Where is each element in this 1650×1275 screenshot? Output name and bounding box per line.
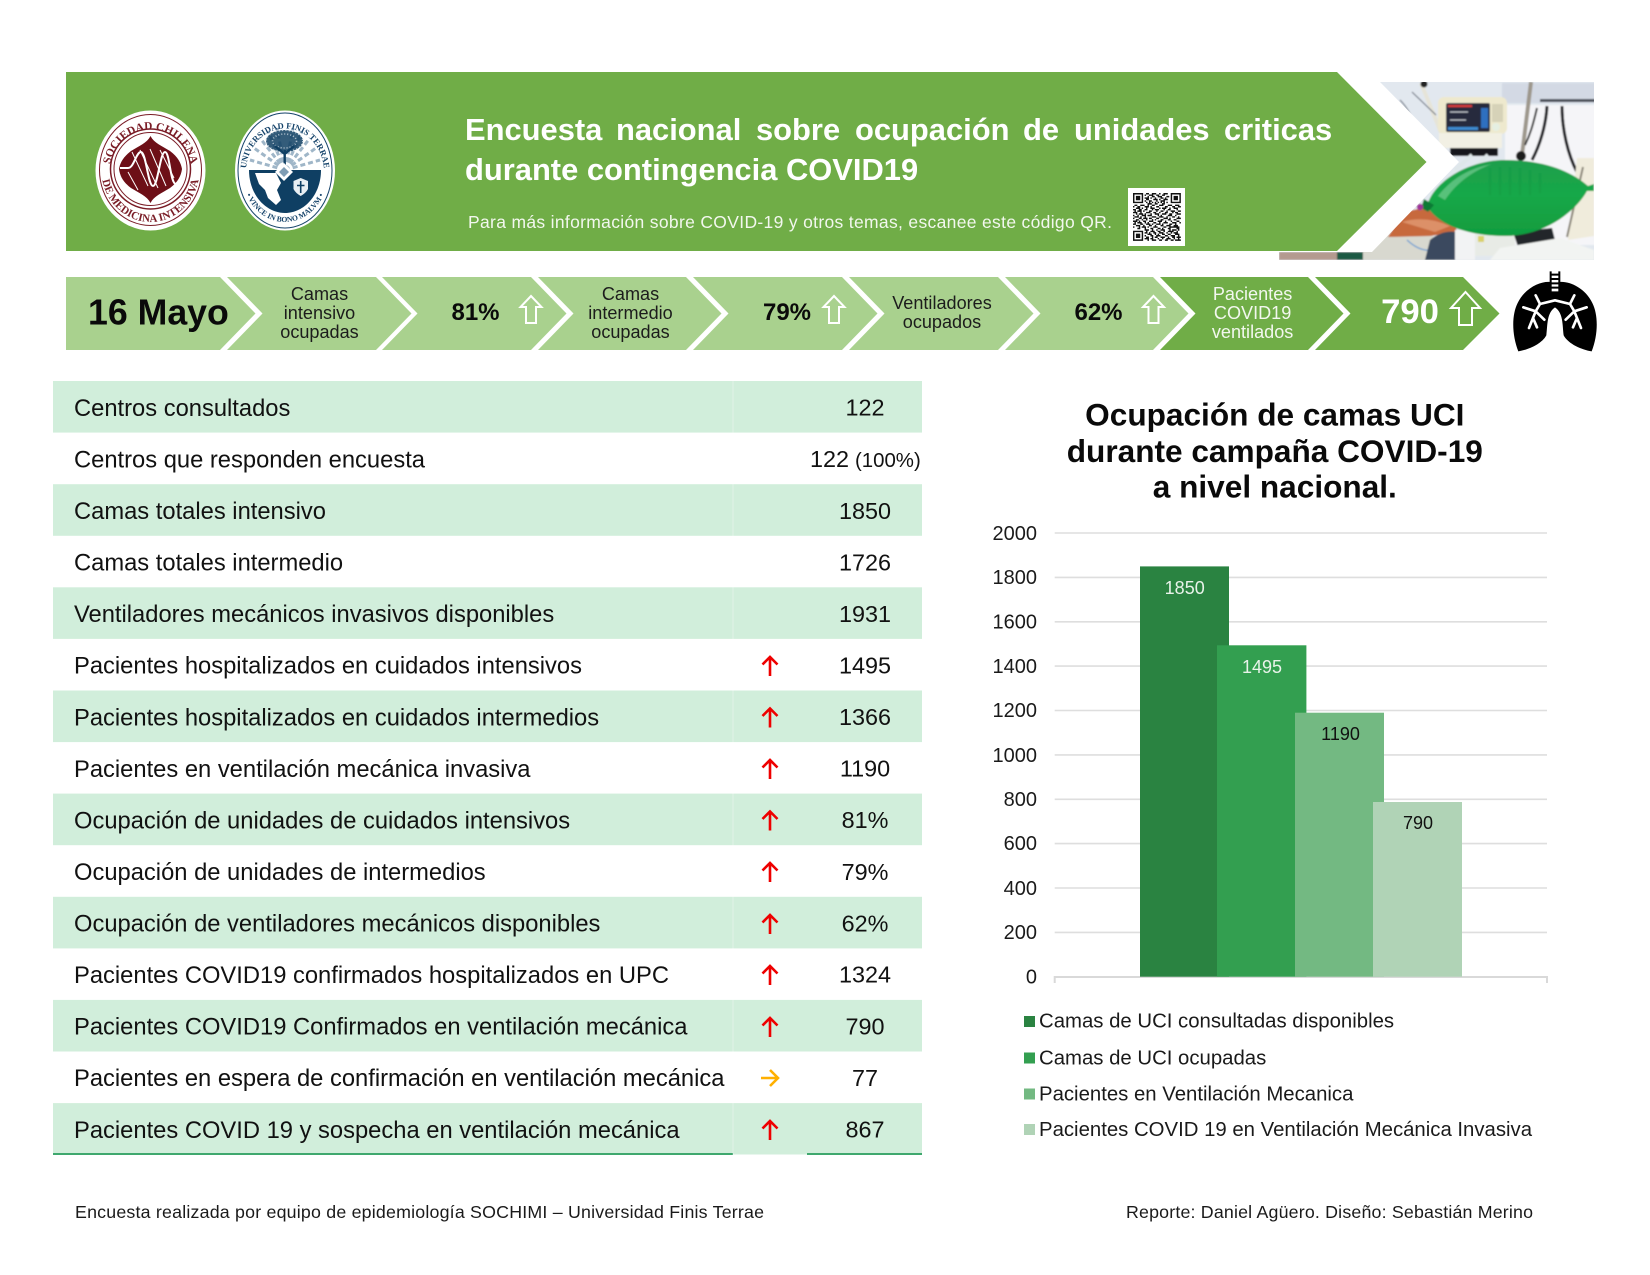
chart title: a nivel nacional. <box>1153 468 1397 504</box>
data table <box>53 381 922 1155</box>
row: ocupación ventiladores: Ocupación de ventiladores mecánicos disponibles <box>74 912 601 938</box>
row: espera de confirmación: 77 <box>852 1065 878 1091</box>
title: de <box>1023 112 1059 147</box>
title: unidades <box>1074 112 1210 147</box>
title: nacional <box>616 112 741 147</box>
logo: Universidad Finis Terrae: • VINCE IN BONO MALVM • <box>248 194 322 222</box>
chart legend <box>1024 1011 1533 1141</box>
row: camas totales intermedio: Camas totales intermedio <box>74 550 343 576</box>
legend: pacientes COVID ventilación: Pacientes COVID 19 en Ventilación Mecánica Invasiva <box>1039 1119 1533 1141</box>
row: hospitalizados intermedios: Pacientes hospitalizados en cuidados intermedios <box>74 705 599 731</box>
legend: camas ocupadas: Camas de UCI ocupadas <box>1039 1047 1266 1069</box>
chevron: camas intermedio ocupadas <box>538 277 722 350</box>
title: criticas <box>1224 112 1332 147</box>
chevron: ventiladores ocupados: ocupados <box>903 312 981 332</box>
row: centros consultados: Centros consultados <box>74 396 291 422</box>
QR code <box>1128 188 1185 246</box>
chevron: ventiladores ocupados <box>849 277 1034 350</box>
chevron: pacientes COVID19 ventilados <box>1160 277 1344 350</box>
y axis labels: 600 <box>1004 833 1037 855</box>
y axis labels: 1600 <box>992 611 1037 633</box>
chevron: camas intermedio ocupadas: intermedio <box>588 303 673 323</box>
y axis labels: 200 <box>1004 922 1037 944</box>
chart title: durante campaña COVID-19 <box>1067 433 1483 469</box>
bar: camas ocupadas 1495: 1495 <box>1242 657 1282 677</box>
row: ocupación intensivos: 81% <box>842 807 888 833</box>
subtitle QR text: Para más información sobre COVID-19 y otros temas, escanee este código QR. <box>468 212 1112 232</box>
row: ocupación intensivos <box>74 807 888 834</box>
row: ventiladores disponibles: Ventiladores mecánicos invasivos disponibles <box>74 602 554 628</box>
chevron: 79%: 79% <box>763 299 811 326</box>
chevron: date: 16 Mayo <box>88 292 229 332</box>
y axis labels <box>992 523 1037 989</box>
row: camas totales intensivo: Camas totales intensivo <box>74 499 326 525</box>
bar chart <box>992 523 1547 989</box>
chevron: date <box>66 277 256 350</box>
legend: camas consultadas: Camas de UCI consultadas disponibles <box>1039 1011 1394 1033</box>
chevron: 790: 790 <box>1381 293 1439 331</box>
row: sospecha en ventilación: 867 <box>845 1117 885 1143</box>
chart title: Ocupación de camas UCI <box>1085 396 1464 432</box>
chevron: 62%: 62% <box>1074 299 1123 326</box>
row: hospitalizados intensivos: 1495 <box>839 653 891 679</box>
row: ocupación ventiladores <box>74 910 888 938</box>
bar: camas ocupadas 1495 <box>1217 645 1306 977</box>
row: centros que responden: Centros que responden encuesta <box>74 447 426 473</box>
y axis labels: 1800 <box>992 567 1037 589</box>
row: ventilación invasiva: 1190 <box>840 756 890 782</box>
title: ocupación <box>855 112 1009 147</box>
row: sospecha en ventilación: Pacientes COVID 19 y sospecha en ventilación mecánica <box>74 1118 680 1144</box>
row: ocupación ventiladores: 62% <box>842 910 888 936</box>
chevron: pacientes COVID19 ventilados: Pacientes <box>1213 284 1292 304</box>
row: centros que responden: 122 <box>810 446 849 472</box>
chevron: ventiladores ocupados: Ventiladores <box>892 293 992 313</box>
chevron: camas intensivo ocupadas: intensivo <box>284 303 355 323</box>
header banner <box>66 72 1426 251</box>
row: ocupación intermedios: 79% <box>842 859 888 885</box>
title: durante contingencia COVID19 <box>465 152 918 187</box>
row: ventiladores disponibles <box>74 601 891 628</box>
y axis labels: 0 <box>1026 967 1037 989</box>
chevron: pacientes COVID19 ventilados: ventilados <box>1212 322 1293 342</box>
row: COVID19 hospitalizados UPC: Pacientes COVID19 confirmados hospitalizados en UPC <box>74 963 669 989</box>
y axis labels: 800 <box>1004 789 1037 811</box>
legend: pacientes ventilación: Pacientes en Ventilación Mecanica <box>1039 1084 1354 1106</box>
row: camas totales intensivo: 1850 <box>839 498 891 524</box>
bar: camas consultadas 1850: 1850 <box>1165 578 1205 598</box>
chevron: 81%: 81% <box>451 299 500 326</box>
chevron: 79% <box>693 277 878 350</box>
y axis labels: 1400 <box>992 656 1037 678</box>
icon: lungs <box>1513 271 1597 351</box>
row: hospitalizados intensivos: Pacientes hospitalizados en cuidados intensivos <box>74 654 582 680</box>
chevron: 81% <box>382 277 566 350</box>
row: camas totales intensivo <box>74 498 891 525</box>
logo: Sociedad Chilena de Medicina Intensiva <box>96 110 206 230</box>
row: centros que responden: (100%) <box>855 450 921 472</box>
footer credit left: Encuesta realizada por equipo de epidemiología SOCHIMI – Universidad Finis Terrae <box>75 1202 764 1222</box>
chevron: pacientes COVID19 ventilados: COVID19 <box>1214 303 1291 323</box>
bar: ventilación 1190 <box>1295 713 1384 977</box>
row: centros consultados <box>74 395 885 422</box>
row: ventiladores disponibles: 1931 <box>839 601 891 627</box>
y axis labels: 2000 <box>992 523 1037 545</box>
row: camas totales intermedio: 1726 <box>839 549 891 575</box>
row: hospitalizados intensivos <box>74 652 891 680</box>
row: COVID19 hospitalizados UPC: 1324 <box>839 962 891 988</box>
bar: camas consultadas 1850 <box>1140 566 1229 977</box>
summary chevron strip <box>66 277 1500 350</box>
row: camas totales intermedio <box>74 549 891 576</box>
photo: ventilator and green resuscitation bag <box>1275 78 1600 264</box>
chevron: camas intensivo ocupadas: ocupadas <box>280 322 359 342</box>
row: ventilación invasiva: Pacientes en ventilación mecánica invasiva <box>74 757 531 783</box>
bar: COVID ventilación 790: 790 <box>1403 813 1433 833</box>
row: ventilación invasiva <box>74 756 890 783</box>
row: ocupación intermedios <box>74 859 888 886</box>
row: COVID19 en ventilación: 790 <box>845 1013 885 1039</box>
bar: ventilación 1190: 1190 <box>1321 724 1360 744</box>
row: ocupación intermedios: Ocupación de unidades de intermedios <box>74 860 486 886</box>
chevron: camas intensivo ocupadas: Camas <box>291 284 348 304</box>
bar: COVID ventilación 790 <box>1373 802 1462 977</box>
chevron: 790 <box>1315 277 1500 350</box>
table row bands <box>53 381 922 1154</box>
y axis labels: 1200 <box>992 700 1037 722</box>
chevron: 62% <box>1005 277 1188 350</box>
title: Encuesta <box>465 112 603 147</box>
title: sobre <box>756 112 840 147</box>
row: centros consultados: 122 <box>845 395 885 421</box>
footer credit right: Reporte: Daniel Agüero. Diseño: Sebastián Merino <box>1126 1202 1533 1222</box>
row: centros que responden <box>74 446 921 473</box>
row: espera de confirmación: Pacientes en espera de confirmación en ventilación mecánica <box>74 1066 725 1092</box>
logo: Universidad Finis Terrae <box>235 110 335 230</box>
row: COVID19 hospitalizados UPC <box>74 962 891 989</box>
logo: Sociedad Chilena de Medicina Intensiva: DE MEDICINA INTENSIVA <box>102 178 199 222</box>
row: ocupación intensivos: Ocupación de unidades de cuidados intensivos <box>74 808 570 834</box>
y axis labels: 1000 <box>992 745 1037 767</box>
chevron: camas intensivo ocupadas <box>227 277 412 350</box>
row: hospitalizados intermedios: 1366 <box>839 704 891 730</box>
row: hospitalizados intermedios <box>74 704 891 731</box>
chevron: camas intermedio ocupadas: Camas <box>602 284 659 304</box>
logo: Universidad Finis Terrae: UNIVERSIDAD FINIS TERRAE <box>240 122 330 168</box>
y axis labels: 400 <box>1004 878 1037 900</box>
chevron: camas intermedio ocupadas: ocupadas <box>591 322 670 342</box>
row: COVID19 en ventilación: Pacientes COVID19 Confirmados en ventilación mecánica <box>74 1014 688 1040</box>
logo: Sociedad Chilena de Medicina Intensiva: SOCIEDAD CHILENA <box>103 122 198 164</box>
